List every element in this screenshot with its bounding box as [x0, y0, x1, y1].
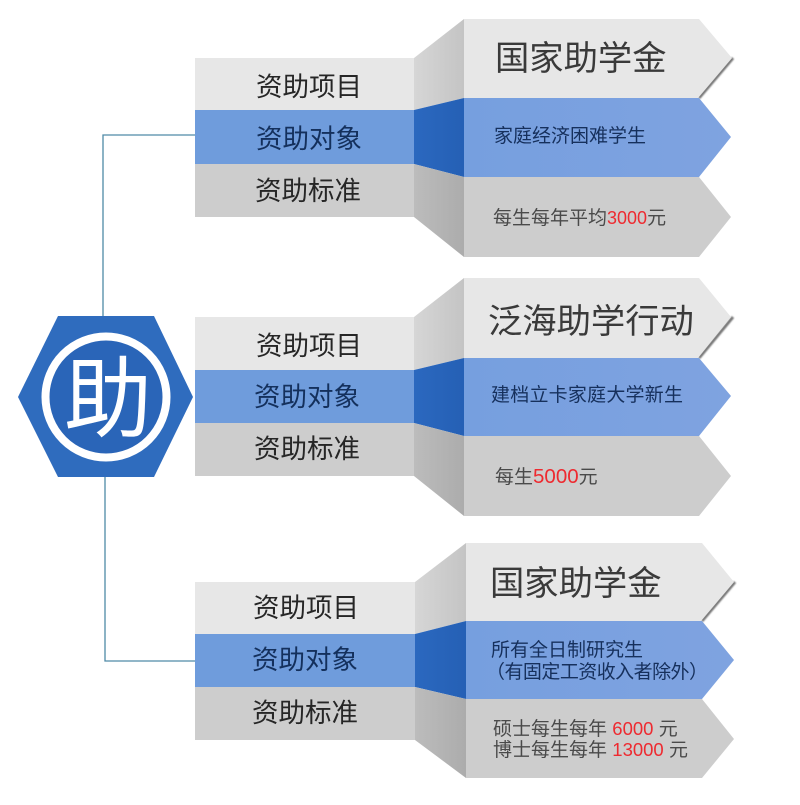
arrow text: 国家助学金 — [490, 565, 662, 603]
row labels: 资助项目 — [256, 72, 362, 102]
row labels: 资助对象 — [252, 645, 358, 675]
connector lines — [103, 135, 195, 661]
right arrows — [464, 19, 733, 257]
fold — [414, 19, 464, 257]
panel: 国家助学金 bottom — [195, 543, 735, 778]
row labels: 资助项目 — [256, 331, 362, 361]
row labels: 资助对象 — [254, 382, 360, 412]
row labels — [254, 331, 362, 464]
arrow text: 家庭经济困难学生 — [494, 125, 646, 147]
arrow text — [493, 40, 666, 229]
arrow text: 每生5000元 — [495, 465, 598, 488]
arrow text — [486, 565, 708, 761]
fold — [415, 543, 466, 778]
panel: 泛海助学行动 middle — [195, 278, 733, 516]
arrow text: （有固定工资收入者除外） — [486, 661, 708, 683]
arrow text: 所有全日制研究生 — [491, 639, 643, 661]
row labels: 资助项目 — [253, 593, 359, 623]
arrow text: 每生每年平均3000元 — [493, 207, 666, 229]
arrow text: 国家助学金 — [495, 40, 666, 78]
arrow text: 泛海助学行动 — [488, 303, 694, 341]
panel: 国家助学金 top — [195, 19, 733, 257]
row labels — [255, 72, 362, 206]
arrow text — [488, 303, 694, 488]
left rows — [195, 582, 415, 740]
row labels: 资助标准 — [255, 176, 361, 206]
row labels: 资助标准 — [252, 698, 358, 728]
right arrows — [466, 543, 735, 778]
arrow text: 硕士每生每年 6000 元 — [493, 718, 678, 740]
right arrows — [464, 278, 733, 516]
left rows — [195, 317, 414, 476]
row labels: 资助对象 — [256, 124, 362, 154]
icon: hexagon badge 助 — [18, 316, 193, 477]
left rows — [195, 58, 414, 217]
row labels: 资助标准 — [254, 434, 360, 464]
arrow text: 建档立卡家庭大学新生 — [491, 384, 683, 406]
icon: hexagon badge 助: 助 — [64, 350, 152, 449]
arrow text: 博士每生每年 13000 元 — [493, 739, 688, 761]
row labels — [252, 593, 359, 728]
fold — [414, 278, 464, 516]
